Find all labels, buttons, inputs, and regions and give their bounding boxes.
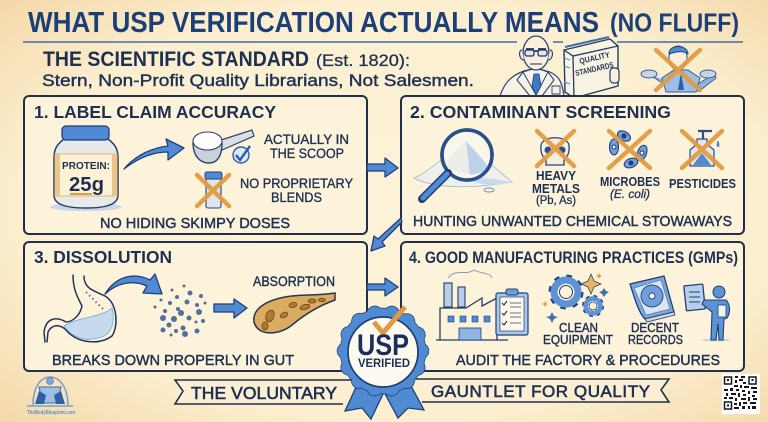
icon: clean gears with sparkles [542, 273, 609, 323]
banner: the voluntary: THE VOLUNTARY [191, 383, 337, 403]
label: heavy metals: (Pb, As) [536, 195, 576, 207]
label: clean equipment: EQUIPMENT [543, 333, 613, 347]
label: microbes [600, 175, 660, 201]
heading: panel 1: 1. LABEL CLAIM ACCURACY [34, 102, 276, 122]
arrow: panel 3 to panel 4 [367, 278, 398, 296]
icon: magnifier over powder [414, 130, 512, 199]
badge: USP verified: VERIFIED [358, 356, 410, 370]
icon: factory with clipboard [436, 270, 528, 340]
label: actually in the scoop: THE SCOOP [270, 146, 344, 161]
title: (NO FLUFF) [610, 8, 739, 38]
label: decent records [628, 321, 683, 347]
caption: panel 2: HUNTING UNWANTED CHEMICAL STOWAWAYS [413, 213, 732, 230]
icon: auditor with clipboard [684, 284, 730, 342]
subtitle: the scientific standard: (Est. 1820): [316, 51, 410, 70]
caption: panel 3: BREAKS DOWN PROPERLY IN GUT [52, 352, 294, 369]
badge: USP verified: USP [357, 329, 409, 362]
heading: panel 3: 3. DISSOLUTION [34, 247, 172, 267]
banner: the voluntary [175, 380, 352, 404]
icon: crossed-out pesticide bottle [682, 131, 722, 168]
label: decent records: RECORDS [628, 333, 683, 347]
badge: USP verified [340, 307, 426, 419]
panel: 4 good manufacturing practices [401, 242, 744, 371]
icon: intestine [254, 293, 335, 333]
arrow: jar to scoop [124, 139, 184, 169]
logo: the body blueprint: TheBodyBlueprint.com [27, 410, 75, 416]
subtitle: the scientific standard: Stern, Non-Profit Quality Librarians, Not Salesmen. [42, 72, 474, 90]
label: actually in the scoop: ACTUALLY IN [264, 132, 349, 147]
label: clean equipment [543, 321, 613, 347]
icon: scoop with check [193, 130, 254, 163]
icon: crossed-out shaker [197, 172, 229, 208]
arrow: panel 1 to panel 2 [367, 158, 398, 177]
banner: gauntlet for quality: GAUNTLET FOR QUALITY [431, 382, 650, 401]
label: decent records: DECENT [631, 321, 679, 335]
icon: protein jar [50, 126, 122, 211]
heading: panel 2: 2. CONTAMINANT SCREENING [410, 102, 671, 122]
icon: dissolved particles [154, 284, 206, 337]
icon: protein jar: 25g [69, 174, 104, 196]
icon: crossed-out microbes [609, 129, 650, 170]
icon: decent records book [630, 276, 675, 322]
label: actually in the scoop [264, 132, 349, 161]
arrow: stomach to particles [105, 274, 162, 294]
label: no proprietary blends: BLENDS [271, 190, 322, 205]
icon: quality standards book: STANDARDS [574, 60, 615, 78]
label: heavy metals: HEAVY [536, 169, 577, 183]
label: no proprietary blends: NO PROPRIETARY [240, 176, 353, 191]
label: heavy metals: METALS [532, 182, 580, 196]
caption: panel 1: NO HIDING SKIMPY DOSES [100, 215, 290, 232]
subtitle: the scientific standard: THE SCIENTIFIC STANDARD [43, 48, 309, 71]
label: pesticides: PESTICIDES [669, 177, 736, 191]
panel: 2 contaminant screening [401, 96, 744, 234]
icon: protein jar: PROTEIN: [62, 161, 110, 172]
panel: 3 dissolution [24, 242, 367, 371]
label: heavy metals [532, 169, 580, 207]
label: absorption: ABSORPTION [253, 274, 335, 289]
icon: crossed-out skull [537, 131, 574, 166]
arrow: particles to absorption [214, 299, 247, 318]
icon: quality standards book: QUALITY [578, 50, 611, 66]
arrow: panel 2 to panel 3 [371, 218, 402, 251]
icon: crossed-out salesman [641, 46, 716, 92]
label: clean equipment: CLEAN [559, 321, 598, 335]
title: WHAT USP VERIFICATION ACTUALLY MEANS [28, 7, 599, 39]
icon: quality standards book [564, 37, 619, 98]
icon: stern scientist librarian [500, 36, 564, 96]
caption: panel 4: AUDIT THE FACTORY & PROCEDURES [456, 352, 720, 369]
label: microbes: (E. coli) [610, 189, 650, 201]
icon: stomach [44, 275, 116, 342]
logo: the body blueprint [27, 377, 75, 416]
panel: 1 label claim accuracy [24, 96, 367, 234]
QR code [722, 374, 760, 414]
subtitle: the scientific standard [42, 48, 474, 90]
label: microbes: MICROBES [600, 175, 660, 189]
label: no proprietary blends [240, 176, 353, 205]
